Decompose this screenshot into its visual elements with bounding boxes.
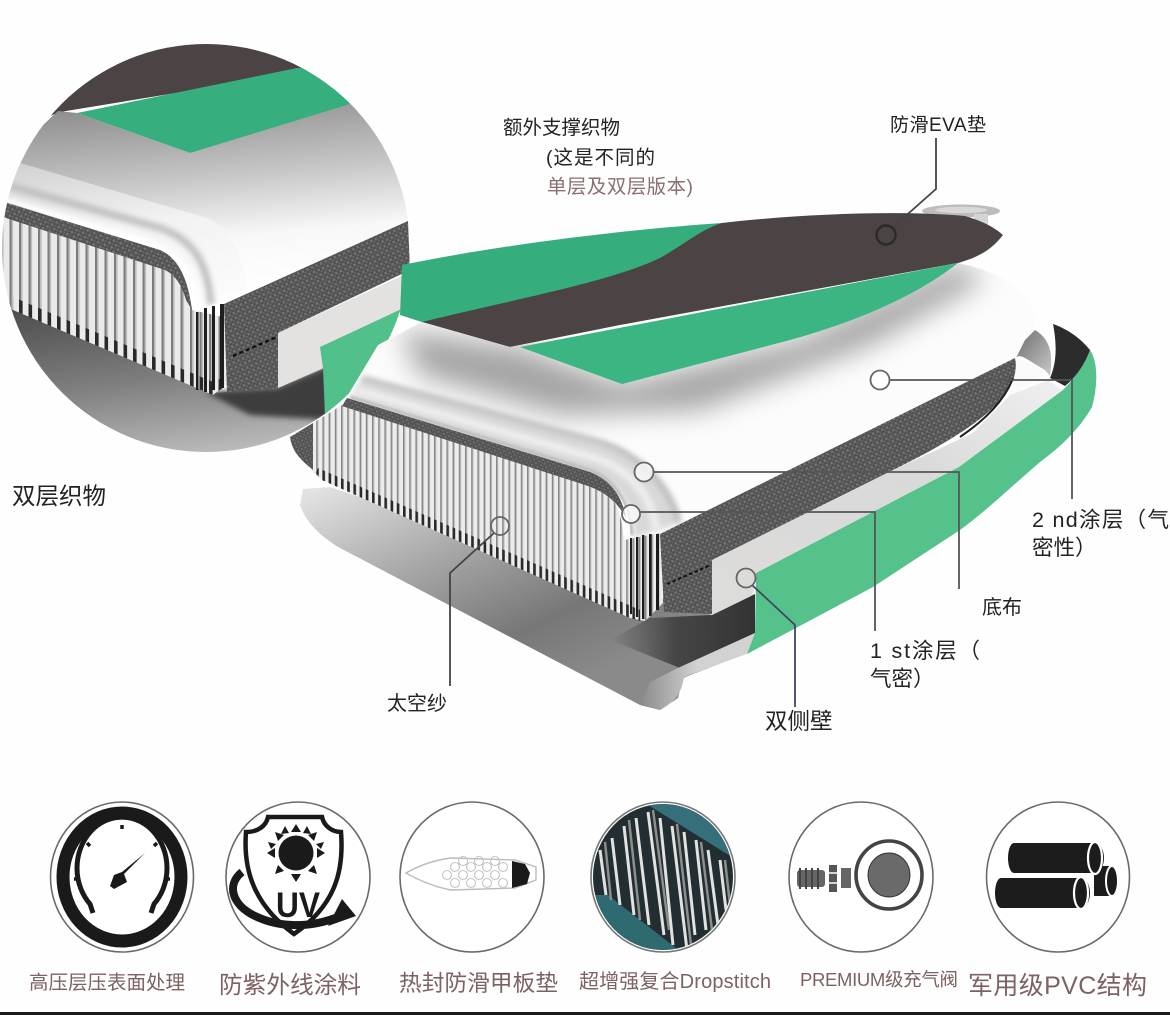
lower body shell (300, 487, 755, 710)
white corner notch (1010, 358, 1044, 395)
upper green stripe (400, 223, 722, 323)
inset: dark deck pad (50, 44, 308, 116)
label: extra support fabric (503, 117, 693, 198)
inset: dark comb corner (196, 304, 224, 392)
icon: deck pad board (400, 802, 544, 952)
stitched seam (667, 565, 711, 584)
dark section below side strip (610, 594, 755, 668)
light lower lip (640, 633, 755, 710)
icon: premium valve (789, 802, 933, 952)
label: dropstitch: 超增强复合Dropstitch (579, 970, 771, 993)
top deck and rim (348, 263, 993, 538)
inner rear wall (1016, 330, 1051, 376)
label: heat sealed deck pad: 热封防滑甲板垫 (399, 970, 558, 996)
label: first coating (870, 639, 980, 691)
inset: green deck stripe (77, 68, 360, 153)
label: first coating: 气密） (870, 667, 935, 691)
inset: side weave band (224, 221, 410, 392)
label: UV coating: 防紫外线涂料 (219, 972, 361, 999)
inset: green side wall (320, 310, 400, 414)
dark band tip (1050, 324, 1090, 386)
callout: first coating (622, 505, 875, 631)
callout: base fabric (634, 462, 959, 589)
callout: double side wall (736, 568, 795, 707)
label: second coating (1032, 508, 1169, 560)
label: double layer fabric: 双层织物 (12, 483, 106, 509)
label: base fabric: 底布 (982, 596, 1022, 619)
inset: top deck surface (7, 104, 408, 236)
inset: spaced yarn comb (0, 212, 227, 395)
dark EVA pad (422, 213, 1003, 347)
icon: UV protection shield (226, 802, 370, 952)
left weave tab (290, 423, 313, 470)
valve (922, 204, 1000, 232)
label: first coating: 1 st涂层（ (870, 639, 980, 663)
inset: front weave band (3, 203, 192, 310)
inset: stitched seam (233, 337, 277, 356)
inset: lower body dark shadow (205, 366, 330, 420)
inset: lower body (0, 298, 330, 460)
label: extra support fabric: 单层及双层版本) (547, 176, 693, 198)
callout: space yarn (450, 517, 509, 686)
green side wall band (747, 350, 1096, 654)
label: anti-slip EVA: 防滑EVA垫 (890, 114, 986, 136)
weave shadow line (960, 378, 1013, 437)
callout: EVA pad (876, 138, 936, 244)
lower green stripe (520, 263, 958, 384)
label: extra support fabric: (这是不同的 (546, 147, 655, 169)
label: space yarn: 太空纱 (387, 692, 447, 715)
icon: pressure gauge (50, 802, 194, 952)
callout: second coating (870, 370, 1072, 499)
side wall light band (712, 380, 1063, 615)
inset: rounded rim (8, 163, 218, 307)
label: military PVC: 军用级PVC结构 (968, 972, 1147, 1000)
label: high pressure laminate surface: 高压层压表面处理 (29, 972, 185, 994)
spaced yarn comb (313, 402, 663, 621)
label: extra support fabric: 额外支撑织物 (503, 117, 620, 139)
inset: white side wall strip (278, 272, 410, 388)
panel: main board cutaway (290, 204, 1096, 710)
label: premium valve: PREMIUM级充气阀 (800, 969, 958, 990)
front weave band (342, 398, 626, 518)
icon: dropstitch close-up (590, 800, 740, 955)
label: double side wall: 双侧壁 (765, 709, 833, 734)
panel: magnified corner detail (0, 40, 420, 460)
inset: comb dark tips (13, 297, 227, 395)
label: second coating: 2 nd涂层（气 (1032, 508, 1169, 532)
dark comb corner (630, 534, 659, 619)
label: second coating: 密性） (1032, 536, 1097, 560)
comb dark tips (316, 468, 640, 621)
icon: PVC pipes (986, 802, 1130, 952)
icon: UV protection shield: UV (276, 886, 321, 925)
side weave band (660, 358, 1016, 614)
